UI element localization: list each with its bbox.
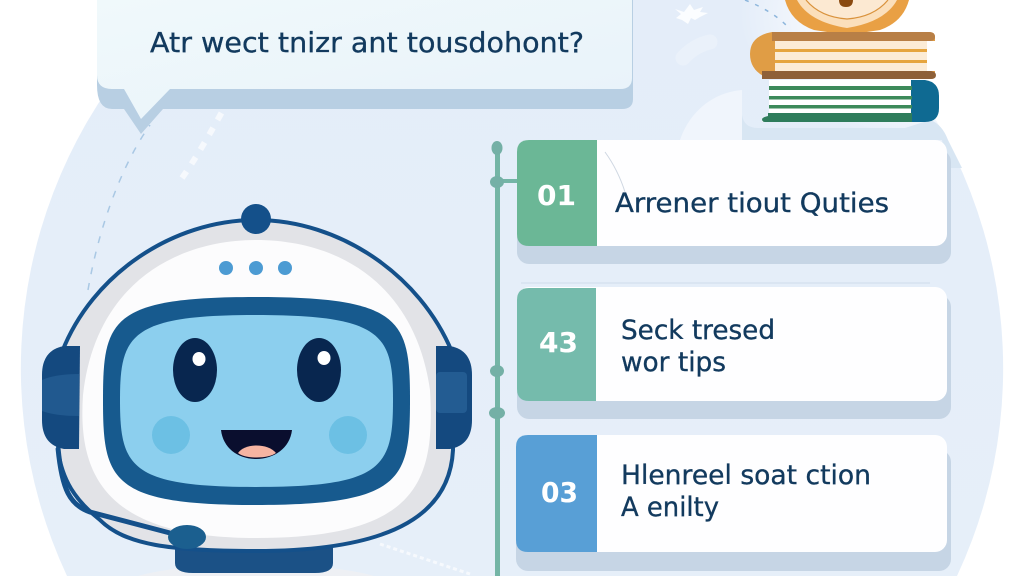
card 3: [516, 435, 951, 571]
card shadow: [517, 150, 951, 264]
card 3: A enilty: [621, 492, 719, 523]
mouth: [221, 430, 292, 459]
label: Seck tresed: [621, 315, 775, 346]
label: Hlenreel soat ction: [621, 460, 871, 491]
number: 03: [541, 476, 578, 509]
screen: [120, 315, 393, 487]
decorative dashed paths: [88, 0, 787, 574]
helmet inner white: [82, 240, 431, 538]
number: 01: [537, 179, 576, 212]
card 2: wor tips: [621, 347, 726, 378]
neck: [175, 545, 333, 573]
number tab: [516, 435, 592, 552]
visor: [103, 297, 410, 505]
number tab: [517, 140, 597, 246]
helmet: [58, 220, 453, 551]
card body: [517, 287, 947, 401]
card 2: [517, 283, 951, 419]
speech bubble: [97, 0, 633, 134]
bubble shadow: [97, 0, 633, 134]
number tab: [517, 288, 596, 401]
left earpiece: [42, 346, 80, 449]
status dots: [219, 261, 292, 275]
bottom green book: [762, 80, 939, 122]
card shadow: [516, 450, 951, 571]
card shadow: [517, 295, 951, 419]
card body: [516, 435, 947, 552]
right earpiece: [436, 346, 472, 449]
robot mascot: [42, 204, 472, 576]
cheeks: [152, 416, 367, 454]
sparkle icon: [675, 4, 708, 24]
body: [138, 564, 374, 576]
eyes: [173, 338, 341, 402]
timeline: [489, 141, 518, 576]
top orange book: [750, 32, 937, 79]
bubble body: [97, 0, 632, 119]
label: Arrener tiout Quties: [615, 188, 889, 219]
icon: clock on books: [750, 0, 939, 122]
card 1: [517, 140, 951, 264]
card body: [517, 140, 947, 246]
microphone boom: [58, 448, 206, 549]
top knob: [241, 204, 271, 234]
clock: [785, 0, 909, 35]
number: 43: [539, 326, 578, 359]
bubble question text: Atr wect tnizr ant tousdohont?: [150, 26, 584, 59]
